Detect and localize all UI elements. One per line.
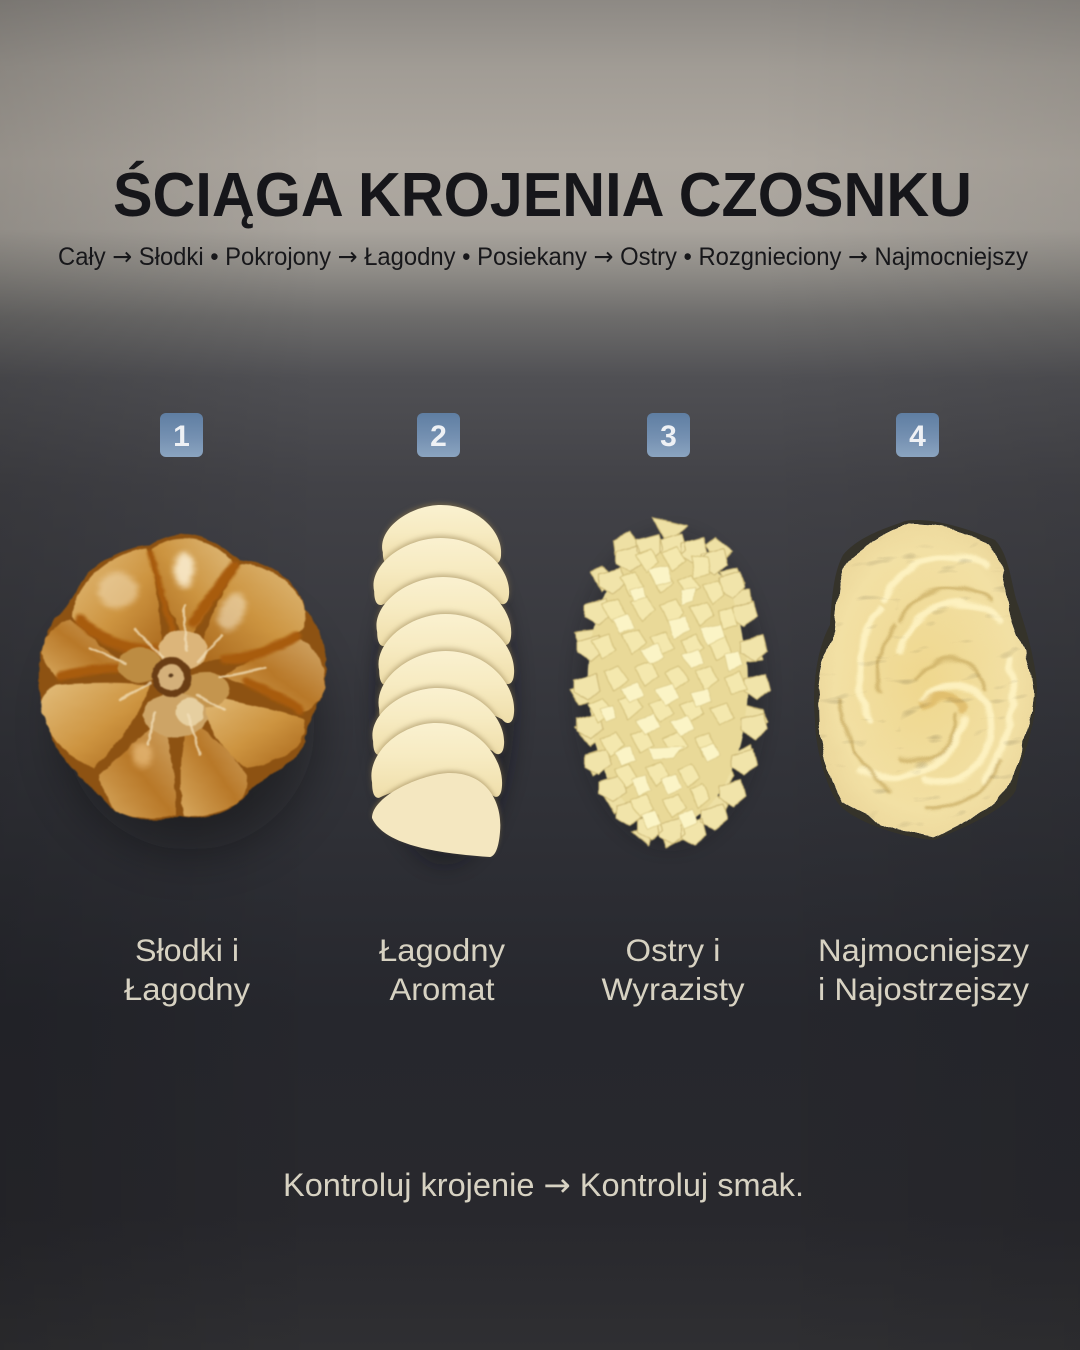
footer tagline: Kontroluj krojenie → Kontroluj smak.: [283, 1166, 804, 1204]
stem: [152, 657, 192, 697]
icon: crushed garlic paste: [814, 520, 1037, 840]
icon: whole garlic bulb: [39, 534, 326, 850]
label: Łagodny Aromat: Łagodny: [379, 932, 505, 968]
highlights and root fibres: [174, 553, 194, 587]
column 1: whole garlic: [39, 413, 326, 1007]
number badge 3: [647, 413, 690, 457]
label: Najmocniejszy i Najostrzejszy: Najmocniejszy: [818, 932, 1029, 968]
label: Ostry i Wyrazisty: Wyrazisty: [602, 971, 745, 1007]
label: Słodki i Łagodny: [124, 932, 250, 1007]
label: Słodki i Łagodny: Łagodny: [124, 971, 250, 1007]
inner cloves: [159, 630, 207, 670]
paste swirls: [840, 556, 1013, 810]
number badge 4: 4: [909, 420, 926, 453]
column 3: minced garlic: [570, 413, 770, 1007]
number badge 2: 2: [430, 420, 447, 453]
subtitle: Cały → Słodki • Pokrojony → Łagodny • Posiekany → Ostry • Rozgnieciony → Najmocniejszy: [58, 242, 1028, 271]
number badge 1: 1: [173, 420, 190, 453]
label: Łagodny Aromat: [379, 932, 505, 1007]
label: Słodki i Łagodny: Słodki i: [135, 932, 239, 968]
number badge 3: 3: [660, 420, 677, 453]
number badge 4: [896, 413, 939, 457]
label: Ostry i Wyrazisty: [602, 932, 745, 1007]
number badge 1: [160, 413, 203, 457]
number badge 2: [417, 413, 460, 457]
icon: minced garlic: [570, 517, 770, 848]
garlic cloves: [41, 538, 325, 818]
title: ŚCIĄGA KROJENIA CZOSNKU: [113, 161, 972, 230]
amber wedge shadows: [60, 552, 300, 710]
label: Łagodny Aromat: Aromat: [390, 971, 495, 1007]
label: Najmocniejszy i Najostrzejszy: [818, 932, 1029, 1007]
column 4: crushed garlic: [814, 413, 1037, 1007]
icon: garlic slices: [371, 505, 515, 865]
label: Ostry i Wyrazisty: Ostry i: [626, 932, 720, 968]
column 2: sliced garlic: [371, 413, 515, 1007]
label: Najmocniejszy i Najostrzejszy: i Najostrzejszy: [818, 971, 1029, 1007]
